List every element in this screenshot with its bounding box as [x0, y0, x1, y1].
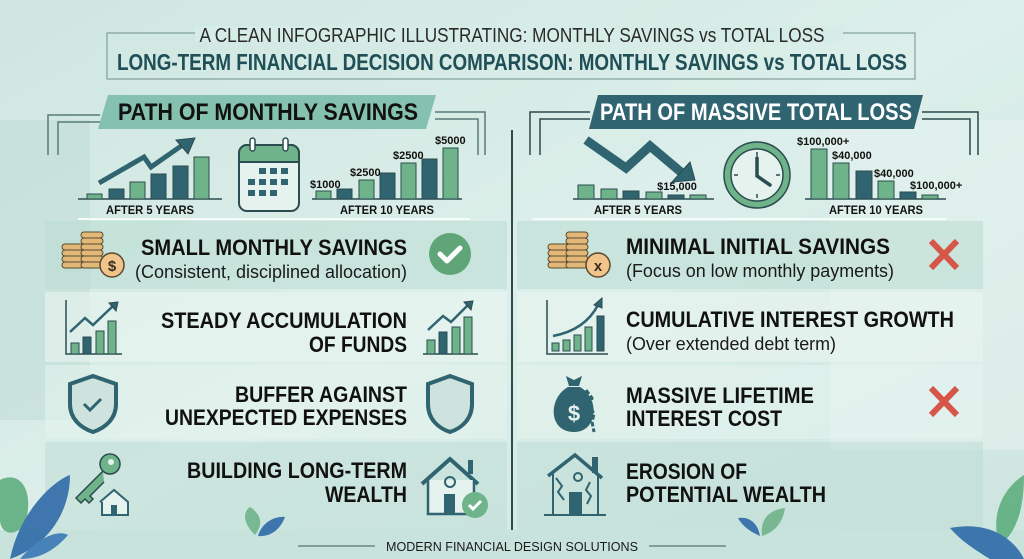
right row 3: massive lifetime interest cost — [554, 376, 957, 432]
right row 1: minimal initial savings: x — [594, 258, 603, 275]
icon: coin stacks with x — [548, 232, 610, 277]
right row 1: minimal initial savings: (Focus on low monthly payments) — [626, 261, 894, 281]
icon: money bag with chain — [554, 376, 594, 432]
left row 3: buffer against unexpected expenses: BUFFER AGAINST — [235, 382, 407, 407]
icon: red x — [931, 388, 957, 415]
chart: left after 10 years — [310, 135, 466, 217]
left row 1: small monthly savings: (Consistent, disciplined allocation) — [135, 262, 407, 282]
right row 4: erosion of potential wealth: EROSION OF — [626, 459, 747, 484]
chart: right after 5 years — [573, 140, 714, 217]
chart: right after 10 years: $100,000+ — [797, 136, 849, 148]
left row 1: small monthly savings: SMALL MONTHLY SAVINGS — [141, 235, 407, 260]
icon: green check — [429, 233, 471, 275]
icon: shield with check — [70, 376, 116, 432]
icon: growth chart left — [66, 300, 122, 354]
right frame lines — [530, 112, 978, 155]
icon: curved growth chart — [547, 298, 608, 354]
right row 1: minimal initial savings: MINIMAL INITIAL SAVINGS — [626, 234, 890, 259]
chart: right after 10 years: $40,000 — [832, 150, 872, 162]
left row 4: building long-term wealth — [76, 454, 488, 518]
chart: right after 5 years: AFTER 5 YEARS — [594, 203, 682, 217]
right row 4: erosion of potential wealth — [544, 455, 826, 515]
left row 3: buffer against unexpected expenses — [70, 376, 472, 432]
center divider — [511, 130, 513, 530]
icon: clock — [724, 142, 790, 208]
icon: money bag with chain: $ — [568, 401, 580, 426]
chart: right after 10 years: $100,000+ — [910, 180, 962, 192]
chart: right after 10 years: AFTER 10 YEARS — [829, 203, 923, 217]
left row 2: steady accumulation: OF FUNDS — [309, 332, 407, 357]
icon: calendar — [239, 138, 299, 211]
banner: path of massive total loss: PATH OF MASSIVE TOTAL LOSS — [600, 99, 912, 126]
banner: path of massive total loss — [589, 95, 923, 129]
chart: left after 5 years — [78, 138, 222, 217]
icon: key and house — [76, 454, 128, 515]
right row 1: minimal initial savings — [548, 232, 957, 281]
left row 3: buffer against unexpected expenses: UNEXPECTED EXPENSES — [165, 405, 407, 430]
left row 2: steady accumulation — [66, 300, 478, 357]
left row 4: building long-term wealth: BUILDING LONG-TERM — [187, 458, 407, 483]
row bands — [45, 221, 507, 289]
icon: cracked house — [544, 455, 606, 515]
chart: left after 10 years: $2500 — [350, 167, 381, 179]
chart: left after 10 years: $1000 — [310, 179, 341, 191]
chart: right after 5 years: $15,000 — [657, 181, 697, 193]
right row 2: cumulative interest growth: (Over extended debt term) — [626, 334, 836, 354]
decorative leaves — [0, 475, 1024, 559]
icon: red x — [931, 241, 957, 268]
right row 3: massive lifetime interest cost: INTEREST COST — [626, 406, 782, 431]
right row 2: cumulative interest growth — [547, 298, 954, 354]
footer: MODERN FINANCIAL DESIGN SOLUTIONS — [386, 539, 638, 554]
left row 1: small monthly savings — [62, 232, 471, 282]
right row 2: cumulative interest growth: CUMULATIVE INTEREST GROWTH — [626, 307, 954, 332]
left row 1: small monthly savings: $ — [108, 258, 117, 275]
left frame lines — [48, 112, 485, 155]
right row 3: massive lifetime interest cost: MASSIVE LIFETIME — [626, 383, 814, 408]
chart: right after 10 years: $40,000 — [874, 168, 914, 180]
left row 4: building long-term wealth: WEALTH — [325, 482, 407, 507]
chart: left after 10 years: $5000 — [435, 135, 466, 147]
title block: A CLEAN INFOGRAPHIC ILLUSTRATING: MONTHLY SAVINGS vs TOTAL LOSS — [200, 25, 824, 47]
chart: left after 10 years: $2500 — [393, 150, 424, 162]
icon: shield — [428, 376, 472, 432]
chart: left after 10 years: AFTER 10 YEARS — [340, 203, 434, 217]
banner: path of monthly savings: PATH OF MONTHLY SAVINGS — [118, 99, 418, 126]
right row 4: erosion of potential wealth: POTENTIAL WEALTH — [626, 482, 826, 507]
icon: coin stacks — [62, 232, 124, 277]
icon: house with check — [422, 459, 488, 518]
left row 2: steady accumulation: STEADY ACCUMULATION — [161, 308, 407, 333]
chart: left after 5 years: AFTER 5 YEARS — [106, 203, 194, 217]
icon: growth chart right — [423, 301, 478, 354]
chart: right after 10 years — [797, 136, 962, 217]
title block — [107, 25, 915, 79]
